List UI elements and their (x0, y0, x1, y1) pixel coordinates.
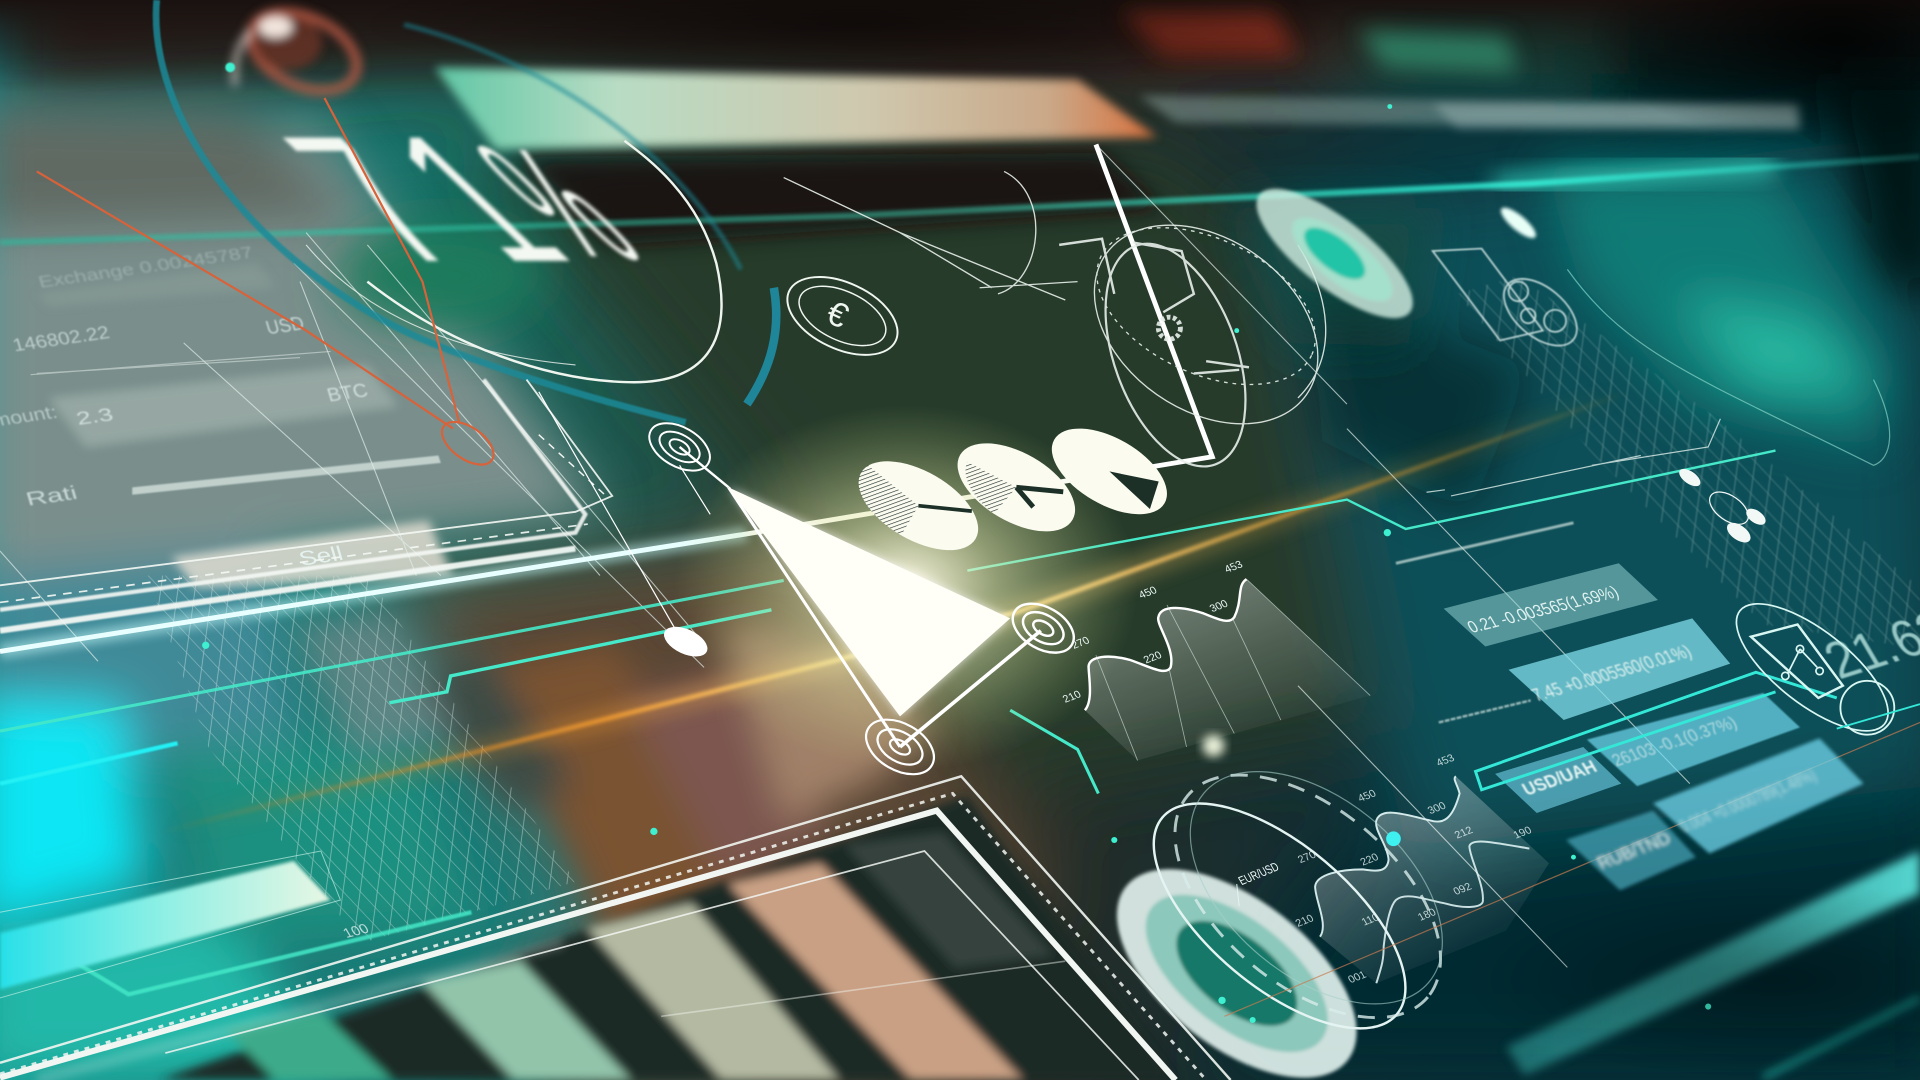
technical drawing (784, 171, 1356, 485)
main white frame line (0, 144, 1212, 651)
line chart: lower: 220 (1358, 851, 1381, 868)
icon: euro coin: € (821, 294, 854, 336)
node right (1004, 594, 1082, 663)
bottom-left highlighted bar (0, 851, 340, 998)
node solid (659, 621, 712, 663)
upper right curve (1567, 269, 1890, 465)
icon: top right donut (1238, 168, 1431, 339)
text: amount: Rati (23, 482, 80, 511)
thin perspective lines (0, 144, 1690, 967)
line chart: lower: 450 (1356, 788, 1379, 805)
node rings (641, 413, 1082, 785)
ellipses and EUR/USD label: EUR/USD (1236, 859, 1281, 888)
top right red and green panels (1120, 12, 1518, 73)
line chart: lower: 300 (1426, 800, 1448, 817)
chart labels: 453 (1222, 559, 1245, 576)
line chart: lower: 190 (1511, 824, 1534, 841)
bracket around USD/UAH (1476, 672, 1837, 790)
text: amount: 2.3 (74, 404, 115, 429)
line chart: lower: 210 (1293, 913, 1316, 930)
bottom frame lines (0, 776, 1231, 1080)
row: 0.004: 0.004 +0.0000789(1.48%) (1675, 765, 1820, 836)
grid mesh left (147, 576, 576, 943)
big percentage: 71 (236, 99, 646, 299)
pie 3 (1038, 411, 1181, 532)
line chart: lower: 001 (1346, 969, 1369, 986)
text: amount: BTC (325, 380, 370, 406)
line chart: lower: 270 (1296, 849, 1319, 866)
text: amount: Exchange 0.00245787 (36, 243, 255, 292)
sparkle particles (202, 62, 1711, 1023)
node top (641, 413, 718, 480)
left frame lines (0, 380, 612, 631)
pie charts (844, 411, 1181, 568)
line chart: lower: 180 (1416, 907, 1439, 923)
line chart: lower: 453 (1434, 752, 1457, 769)
orange streak (159, 392, 1629, 833)
teal circuit lines (0, 451, 1776, 994)
row: 26103: 26103 -0.1(0.37%) (1608, 712, 1740, 770)
chart labels: 300 (1208, 598, 1230, 615)
line chart: lower: 212 (1453, 824, 1475, 841)
icon: euro coin (775, 261, 910, 371)
ellipses and EUR/USD label (1117, 726, 1486, 1069)
wide teal beam (0, 157, 1920, 243)
chart labels: 450 (1137, 584, 1159, 601)
line chart: lower: 092 (1451, 881, 1474, 898)
orange lower line (1224, 722, 1920, 1016)
row: 0.21 (1444, 563, 1658, 647)
row: USD/UAH: USD/UAH (1519, 757, 1600, 799)
row: 0.21: 0.21 -0.003565(1.69%) (1463, 582, 1622, 636)
pie 1 (844, 443, 993, 568)
row: USD/UAH (1495, 747, 1621, 813)
icon: phone device (1433, 249, 1589, 359)
row: RUB/TND (1566, 811, 1696, 890)
grid mesh right (1457, 276, 1920, 649)
text: sell: Sell (296, 542, 346, 571)
row: 7.45 (1509, 618, 1730, 720)
row: 0.004 (1653, 738, 1864, 853)
row: 7.45: 7.45 +0.0005560(0.01%) (1528, 641, 1696, 706)
chart labels (1061, 559, 1245, 705)
panel: rate table (1444, 563, 1864, 890)
icon: red rings (235, 0, 369, 106)
row: RUB/TND: RUB/TND (1594, 828, 1674, 873)
top-left arcs (156, 0, 776, 422)
text: amount (0, 243, 370, 511)
big percentage: % (432, 111, 684, 294)
line chart: upper (1061, 559, 1370, 760)
flare behind triangle (673, 404, 1139, 771)
network symbol upper right (1427, 419, 1768, 546)
chart labels: 220 (1142, 649, 1164, 666)
top banner bar (435, 67, 1157, 149)
panel: bottom stripes (159, 796, 1176, 1080)
chart labels: 270 (1069, 635, 1092, 652)
triangle (729, 487, 1010, 716)
icon: share device and numbers (1717, 582, 1920, 753)
divider strokes (1396, 523, 1573, 722)
bottom right beams (1506, 851, 1920, 1078)
chart labels: 210 (1061, 689, 1083, 705)
line chart: lower: 110 (1359, 912, 1381, 928)
text: amount: USD (263, 313, 307, 339)
panel: blurred centre stripes (294, 612, 931, 943)
label: scale 100: 100 (340, 922, 372, 941)
green glow under percentage (337, 220, 545, 331)
left data panel (0, 243, 453, 588)
donut ring (1081, 829, 1393, 1080)
node bottom (857, 708, 943, 785)
upper haze band (1139, 96, 1800, 129)
glow dot (1202, 735, 1224, 757)
pie 2 (943, 425, 1090, 549)
dark zone below banner (514, 153, 1163, 245)
line chart: lower (1293, 752, 1549, 986)
triangle connector lines (539, 392, 1041, 747)
orange line and node (37, 98, 501, 473)
text: amount: 146802.22 (10, 322, 112, 355)
row: 26103 (1587, 693, 1800, 786)
